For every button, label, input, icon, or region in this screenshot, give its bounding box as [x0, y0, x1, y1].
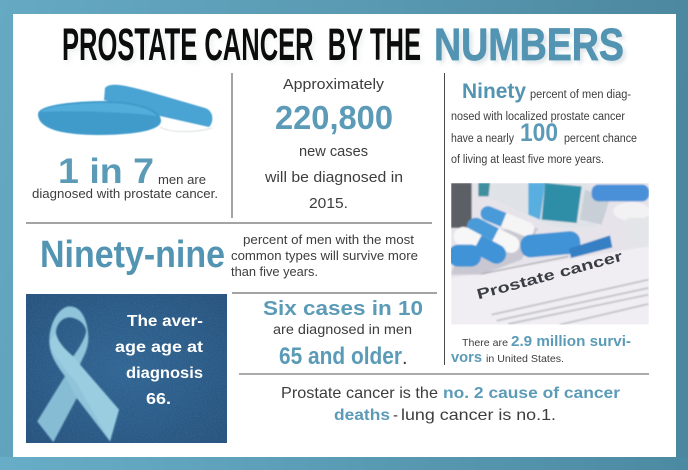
stat: 2.9 million survivors	[451, 333, 631, 366]
average age text: The aver-	[127, 313, 203, 330]
panel: denim photo with average age	[26, 294, 227, 443]
stat: 220,800 new cases	[264, 77, 403, 212]
stat: ninety-nine percent	[40, 233, 418, 279]
stat: ninety-nine percent: percent of men with the most	[243, 233, 415, 247]
stat: 220,800 new cases: new cases	[299, 144, 368, 160]
stat: no. 2 cause of cancer deaths: Prostate cancer is the	[281, 385, 438, 402]
title: PROSTATE CANCER BY THE	[65, 22, 424, 73]
icon: awareness ribbon	[37, 306, 119, 442]
average age text	[115, 313, 204, 408]
stat: 220,800 new cases: will be diagnosed in	[264, 170, 403, 186]
title: NUMBERS	[437, 22, 627, 73]
stat: ninety percent	[451, 80, 637, 166]
stat: six cases in 10: .	[402, 347, 408, 369]
stat: no. 2 cause of cancer deaths: -	[393, 407, 398, 424]
average age text: 66.	[146, 391, 171, 408]
stat: ninety percent: Ninety	[462, 80, 526, 103]
stat: ninety-nine percent: Ninety-nine	[40, 234, 225, 276]
stat: 220,800 new cases: 2015.	[309, 196, 348, 212]
stat: no. 2 cause of cancer deaths: deaths	[334, 407, 390, 424]
title: NUMBERS	[434, 19, 624, 70]
stat: six cases in 10	[263, 298, 423, 370]
stat: 2.9 million survivors: vors	[451, 349, 482, 366]
stat: 220,800 new cases: 220,800	[275, 99, 393, 136]
average age text: diagnosis	[126, 365, 203, 382]
stat: six cases in 10: Six cases in 10	[263, 298, 423, 320]
stat: ninety percent: nosed with localized prostate cancer	[451, 111, 625, 123]
stat: ninety-nine percent: than five years.	[231, 265, 318, 279]
stat: ninety percent: percent chance	[564, 133, 637, 145]
stat: ninety percent: 100	[520, 119, 558, 147]
average age text: age age at	[115, 339, 204, 356]
stat: no. 2 cause of cancer deaths	[281, 385, 620, 424]
stat: 1 in 7: men are	[158, 173, 206, 187]
stat: 1 in 7: 1 in 7	[58, 152, 154, 191]
title: PROSTATE CANCER BY THE	[62, 19, 421, 70]
stat: 1 in 7	[32, 152, 218, 201]
stat: 2.9 million survivors: in United States.	[486, 353, 564, 365]
stat: no. 2 cause of cancer deaths: lung cancer is no.1.	[401, 407, 556, 424]
photo: pills and prostate cancer paper	[448, 183, 650, 325]
stat: no. 2 cause of cancer deaths: no. 2 cause of cancer	[443, 385, 620, 402]
stat: ninety percent: percent of men diag-	[530, 89, 631, 101]
stat: 2.9 million survivors: There are	[462, 337, 508, 349]
stat: ninety percent: have a nearly	[451, 133, 514, 145]
section dividers	[26, 73, 649, 374]
stat: ninety percent: of living at least five more years.	[451, 154, 604, 166]
stat: six cases in 10: are diagnosed in men	[273, 322, 412, 337]
stat: 1 in 7: diagnosed with prostate cancer.	[32, 186, 218, 201]
stat: 220,800 new cases: Approximately	[283, 77, 385, 93]
icon: awareness wristbands	[38, 85, 212, 135]
stat: six cases in 10: 65 and older	[279, 343, 402, 370]
stat: 2.9 million survivors: 2.9 million survi-	[511, 333, 631, 350]
paper heading: Prostate cancer	[475, 249, 625, 303]
stat: ninety-nine percent: common types will survive more	[231, 249, 418, 263]
